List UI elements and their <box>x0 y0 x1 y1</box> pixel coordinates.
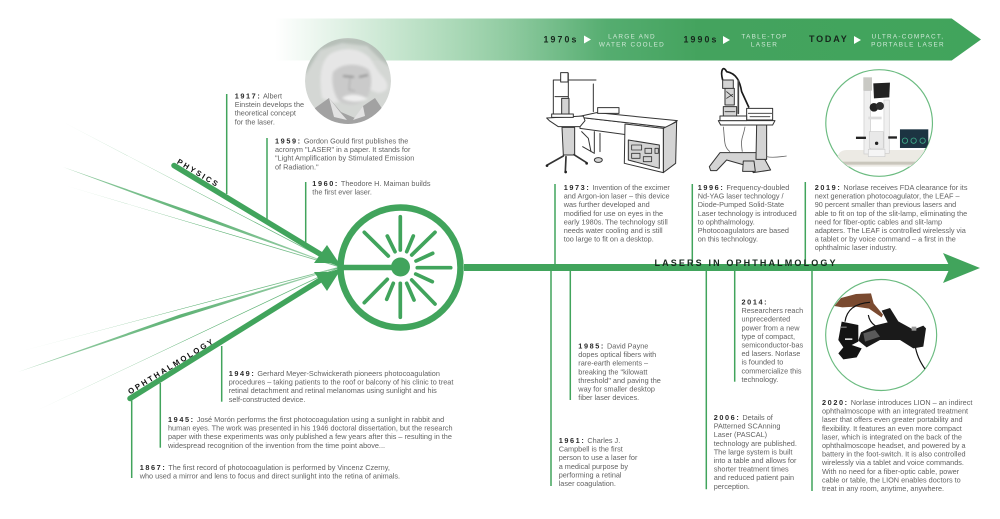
milestone 1996: to ophthalmology. <box>698 217 755 226</box>
milestone 1945: paper with these experiments was only published a few years after this – resulting in the <box>168 432 452 441</box>
era: 1990s <box>684 34 788 48</box>
milestone 2020: cable or table, the LION enables doctors to <box>822 475 961 484</box>
milestone 1867 <box>132 398 400 481</box>
milestone 2020: treat in any room, anytime, anywhere. <box>822 484 944 493</box>
milestone 1961: Campbell is the first <box>559 445 623 454</box>
milestone 2019: ophthalmic laser industry. <box>815 243 897 252</box>
milestone 2020: wirelessly via a tablet and voice commands. <box>821 458 964 467</box>
milestone 1973: was further developed and <box>563 200 650 209</box>
milestone 1985: fiber laser devices. <box>578 393 639 402</box>
era: 1990s: 1990s <box>684 34 718 44</box>
illustration: 1970s desk laser <box>546 73 677 173</box>
era: today <box>809 34 945 48</box>
milestone 2014: commercialize this <box>742 366 802 375</box>
milestone 1996: Photocoagulators are based <box>698 226 789 235</box>
milestone 1985: 1985: David Payne <box>578 342 648 350</box>
era: today: ULTRA-COMPACT, <box>872 34 944 40</box>
milestone 1960 <box>306 179 431 244</box>
milestone 1917 <box>227 92 304 194</box>
banner: era arrow <box>275 18 981 60</box>
milestone 2019: 90 percent smaller than previous lasers and <box>815 200 956 209</box>
label: ophthalmology: OPHTHALMOLOGY <box>126 336 216 396</box>
milestone 1961: performing a retinal <box>559 470 622 479</box>
milestone 2006: technology are published. <box>714 439 797 448</box>
era: 1970s: WATER COOLED <box>599 42 665 48</box>
milestone 2019: adapters. The LEAF is controlled wirelessly via <box>815 226 967 235</box>
milestone 2020: battery in the foot-switch. It is also controlled <box>822 450 966 459</box>
milestone 2006: Laser (PASCAL) <box>714 430 767 439</box>
milestone 1949: self-constructed device. <box>229 395 305 404</box>
milestone 1945: human eyes. The work was presented in his 1946 doctoral dissertation, but the research <box>168 424 453 433</box>
axis title: LASERS IN OPHTHALMOLOGY <box>654 258 836 268</box>
era: 1970s: LARGE AND <box>608 34 656 40</box>
milestone 1996: on this technology. <box>698 235 758 244</box>
milestone 1949 <box>222 346 453 404</box>
milestone 2014: ed lasers. Norlase <box>742 349 800 358</box>
milestone 2006 <box>706 270 797 491</box>
milestone 1949: 1949: Gerhard Meyer-Schwickerath pioneers photocoagulation <box>229 369 440 378</box>
milestone 1917: Einstein develops the <box>235 100 304 109</box>
beams: converging light rays <box>18 122 340 410</box>
milestone 2019: a tablet or by voice command – a first in the <box>815 235 956 244</box>
era: today: TODAY <box>809 34 849 44</box>
axis arrow: lasers in ophthalmology <box>464 253 980 283</box>
era: 1990s: LASER <box>751 42 778 48</box>
milestone 1867: 1867: The first record of photocoagulation is performed by Vincenz Czerny, <box>140 463 390 472</box>
milestone 2006: into a table and allows for <box>714 456 797 465</box>
milestone 1960: the first ever laser. <box>312 188 372 197</box>
milestone 1985 <box>570 270 661 402</box>
milestone 1959: acronym "LASER" in a paper. It stands for <box>275 145 411 154</box>
label: physics: PHYSICS <box>175 157 221 189</box>
milestone 1973 <box>555 183 670 265</box>
milestone 1960: 1960: Theodore H. Maiman builds <box>312 179 431 188</box>
milestone 1961: 1961: Charles J. <box>559 436 620 445</box>
milestone 1996: Nd-YAG laser technology / <box>698 192 785 201</box>
milestone 1973: 1973: Invention of the excimer <box>564 183 670 192</box>
milestone 1985: threshold" and paving the <box>578 376 661 385</box>
era: 1970s <box>544 34 665 48</box>
laser symbol <box>338 208 460 328</box>
milestone 2014: technology. <box>742 375 778 384</box>
milestone 2014: Researchers reach <box>742 306 803 315</box>
milestone 1961: laser coagulation. <box>559 479 616 488</box>
milestone 2020: 2020: Norlase introduces LION – an indirect <box>822 398 972 407</box>
arrow: physics <box>174 166 342 268</box>
milestone 1973: needs water cooling and is still <box>564 226 663 235</box>
illustration: LEAF photocoagulator <box>826 70 933 176</box>
milestone 1985: dopes optical fibers with <box>578 350 656 359</box>
milestone 1985: rare-earth elements – <box>578 359 649 368</box>
milestone 2014: is founded to <box>742 358 783 367</box>
milestone 2019 <box>805 182 968 265</box>
milestone 2019: next generation photocoagulator, the LEAF – <box>815 192 960 201</box>
milestone 1945: 1945: José Morón performs the first photocoagulation using a sunlight in rabbit and <box>168 415 444 424</box>
milestone 2014: semiconductor-bas <box>742 340 803 350</box>
milestone 2006: PAtterned SCAnning <box>714 422 780 431</box>
milestone 1973: modified for use on eyes in the <box>564 209 663 218</box>
milestone 1961 <box>551 270 638 488</box>
milestone 1917: theoretical concept <box>235 109 296 118</box>
milestone 2019: 2019: Norlase receives FDA clearance for its <box>815 183 968 192</box>
illustration: 1990s table-top laser <box>709 69 787 173</box>
milestone 2020: With no need for a fiber-optic cable, power <box>822 467 960 476</box>
milestone 1959 <box>267 136 414 219</box>
arrow: ophthalmology <box>130 268 342 398</box>
milestone 2014: unprecedented <box>742 315 790 324</box>
milestone 1996: Laser technology is introduced <box>698 209 797 218</box>
milestone 2020: ophthalmoscope headset, and powered by a <box>822 441 967 450</box>
era: 1970s: 1970s <box>544 34 578 44</box>
milestone 2020: laser that offers even greater portability and <box>822 415 963 424</box>
milestone 2014: type of compact, <box>742 332 795 341</box>
milestone 2020: laser, which is integrated on the back of the <box>822 432 962 441</box>
era: 1990s: TABLE-TOP <box>741 34 788 40</box>
milestone 2014 <box>735 270 803 384</box>
milestone 1985: breaking the "kilowatt <box>578 367 647 376</box>
milestone 1973: early 1980s. The technology still <box>564 217 668 226</box>
milestone 1959: "Light Amplification by Stimulated Emission <box>275 154 414 163</box>
milestone 1973: too large to fit on a desktop. <box>564 235 654 244</box>
milestone 1945: widespread recognition of the invention from the time point above... <box>167 441 385 450</box>
milestone 2020: ophthalmoscope with an integrated treatment <box>822 407 968 416</box>
milestone 1961: a medical purpose by <box>559 462 628 471</box>
milestone 1996: 1996: Frequency-doubled <box>698 183 789 192</box>
milestone 1973: and Argon-ion laser – this device <box>564 192 670 201</box>
milestone 1959: of Radiation." <box>275 162 319 171</box>
milestone 2006: and reduced patient pain <box>714 473 794 482</box>
milestone 1949: retinal detachment and retinal melanomas using sunlight and his <box>229 386 437 395</box>
milestone 2006: The large system is built <box>714 447 792 456</box>
milestone 2020 <box>812 270 972 493</box>
milestone 2014: power from a new <box>742 323 800 332</box>
milestone 2019: able to fit on top of the slit-lamp, eliminating the <box>815 209 967 218</box>
milestone 2006: 2006: Details of <box>714 413 774 422</box>
milestone 2019: need for fiber-optic cables and slit-lamp <box>815 217 942 226</box>
milestone 1996: Diode-Pumped Solid-State <box>698 200 784 209</box>
milestone 2020: flexibility. It features an even more compact <box>822 424 962 433</box>
milestone 2006: perception. <box>714 482 750 491</box>
milestone 2006: shorter treatment times <box>714 465 789 474</box>
milestone 1996 <box>692 183 797 265</box>
milestone 2014: 2014: <box>742 298 768 306</box>
milestone 1959: 1959: Gordon Gould first publishes the <box>275 136 408 146</box>
illustration: LION ophthalmoscope <box>826 279 937 390</box>
milestone 1961: person to use a laser for <box>559 453 638 462</box>
portrait: Albert Einstein <box>305 38 391 128</box>
milestone 1917: for the laser. <box>235 117 275 126</box>
milestone 1867: who used a mirror and lens to focus and direct sunlight into the retina of animals. <box>139 472 400 481</box>
milestone 1917: 1917: Albert <box>235 92 282 100</box>
milestone 1985: way for smaller desktop <box>577 384 655 394</box>
milestone 1945 <box>160 383 453 450</box>
milestone 1949: procedures – taking patients to the roof or balcony of his clinic to treat <box>229 378 453 387</box>
era: today: PORTABLE LASER <box>871 42 945 48</box>
